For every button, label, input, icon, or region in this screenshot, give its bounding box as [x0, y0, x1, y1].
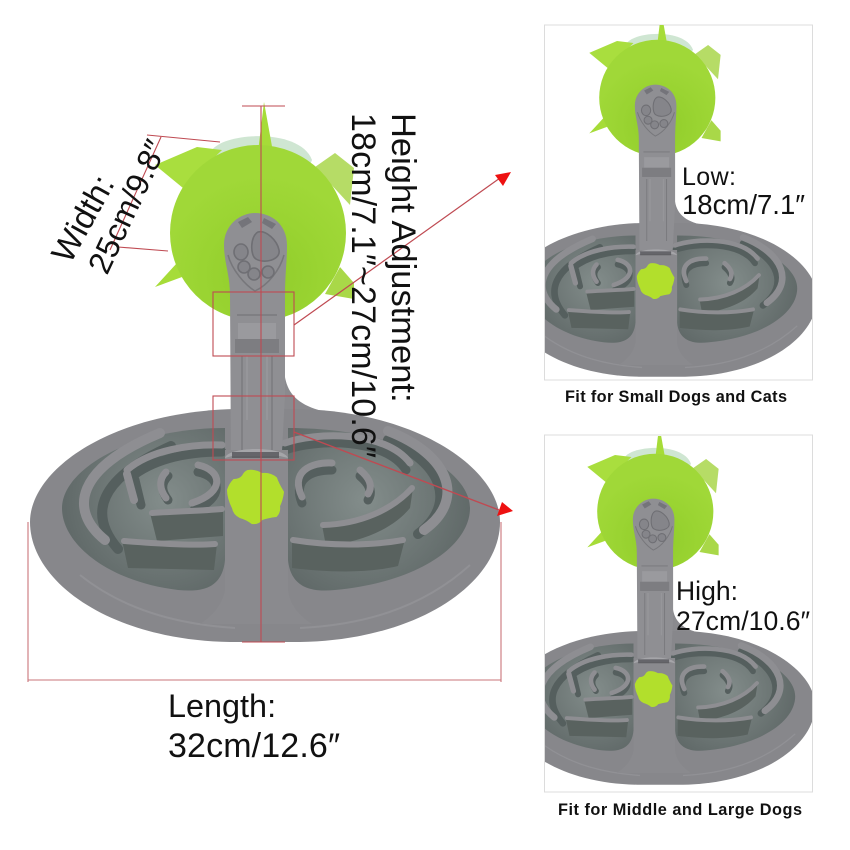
label: width: Width: [44, 169, 121, 268]
length marker lines [28, 522, 501, 682]
high height label: High: [676, 576, 738, 606]
low height label: Low: [682, 163, 736, 191]
label: height adjustment: Height Adjustment: [384, 113, 422, 403]
label: height adjustment: 18cm/7.1″~27cm/10.6″ [344, 113, 382, 458]
label: length: Length: [168, 688, 276, 724]
adjustable arm and green disc with paw head [155, 102, 354, 470]
high height label [676, 576, 810, 636]
product base with maze bowls [30, 368, 500, 642]
arrow to high panel [294, 432, 513, 516]
low panel product [545, 25, 812, 377]
panel: low setting [544, 24, 813, 380]
width marker lines [110, 135, 220, 251]
height centre line [242, 106, 285, 642]
panel: high setting [544, 434, 813, 792]
main product illustration [30, 102, 500, 642]
arrow to low panel [294, 172, 511, 325]
label: height adjustment [344, 113, 422, 458]
high position box [213, 396, 294, 460]
high height label: 27cm/10.6″ [676, 606, 810, 636]
label: length: 32cm/12.6″ [168, 727, 340, 765]
low height label: 18cm/7.1″ [682, 189, 805, 220]
label: length [168, 688, 340, 765]
dimension annotations [28, 106, 501, 682]
caption: middle and large dogs: Fit for Middle and Large Dogs [558, 801, 802, 819]
high panel product [545, 436, 812, 785]
low height label [682, 163, 805, 220]
centre post and lime knob [200, 449, 312, 624]
caption: small dogs and cats: Fit for Small Dogs and Cats [565, 388, 787, 406]
label: width: 25cm/9.8″ [81, 134, 174, 279]
low position box [213, 292, 294, 356]
